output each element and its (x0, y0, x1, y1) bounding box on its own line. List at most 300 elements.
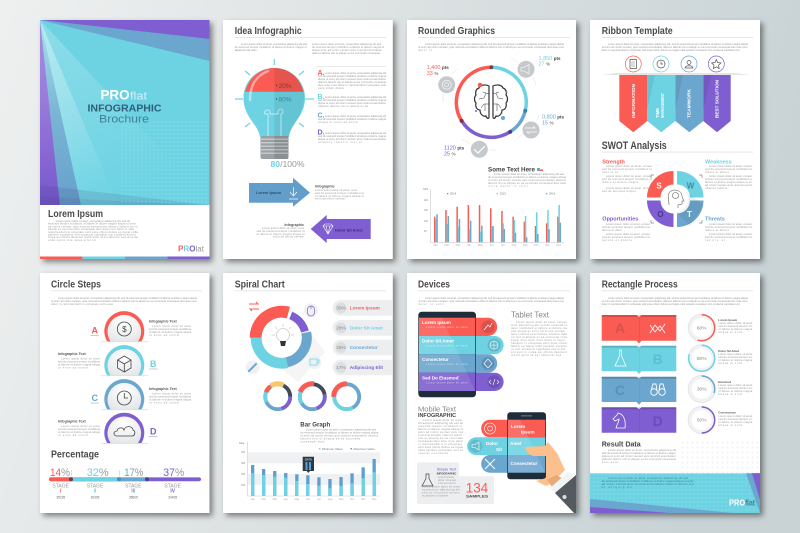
chart text: irure dolor in velit (488, 184, 528, 188)
stage labels: I (60, 488, 62, 494)
Strength: Strength (602, 159, 626, 165)
bar chart: monthly: Jun (489, 243, 494, 247)
pill: Dolor Sit Amet (333, 320, 393, 336)
footer band: Lorem ipsum dolor sit amet, consectetur adipiscing elit sed (608, 476, 688, 480)
label: Consectetur: ut labore et dolore magna (718, 420, 753, 424)
Weakness: Lorem ipsum dolor sit amet, consec (709, 164, 753, 168)
cover text block: pariatur excepteur sint occaecat cupidatat non proident sunt in (48, 232, 136, 236)
intro text: ut enim ad minim veniam, quis nostrud exercitation ullamco laboris nisi ut aliquip ex ea commodo consequat duis aute irure (51, 299, 198, 303)
tablet: Lorem Ipsum (422, 320, 451, 325)
label: Dolor Sit Amet: Dolor Sit Amet (718, 349, 739, 353)
result data: Result Data (602, 440, 641, 449)
label: Eiusmod: sed do eiusmod tempor inc (718, 386, 753, 390)
pill: Adipiscing Elit: Adipiscing Elit (350, 365, 383, 371)
bar graph text: ut enim ad minim veniam quis nostrud exercitation ullamco (300, 434, 379, 438)
legend A-D: sed do eiusmod tempor incididunt ut labore et dolore magna (318, 74, 386, 78)
tablet text: quis nostrud exercitation ullamco labo (511, 332, 568, 336)
stat: 1,850 pts (538, 56, 561, 68)
Weakness (705, 159, 753, 190)
panel: rectangle process (590, 273, 760, 513)
progress 60%: 60% (697, 326, 707, 332)
Threats: Threats (705, 217, 725, 223)
intro text (51, 296, 198, 306)
tablet: Sed Do Eiusmod (422, 375, 459, 380)
pill: Dolor Sit Amet: Dolor Sit Amet (350, 325, 383, 331)
bar chart: min max: Jul (317, 497, 321, 501)
ring chart (456, 65, 527, 137)
step text 4: ut enim ad minim (58, 433, 89, 437)
step A: $ (122, 325, 127, 334)
label: Eiusmod: aliqua ut enim (718, 392, 743, 396)
pill: Adipiscing Elit: 17% (336, 365, 347, 371)
panel: rounded graphics (407, 20, 576, 259)
phone: Lorem (511, 424, 525, 429)
chart text: ut enim ad minim veniam quis nostrud exercitation ullamco (488, 178, 566, 182)
Weakness: labore et dolore (705, 170, 730, 174)
stat: 1,400 pts (427, 65, 449, 77)
tablet text: tetur adipiscing elit sed do eiusmod te (511, 323, 568, 327)
legend A-D: C. (318, 113, 325, 120)
bar chart: min max (239, 442, 380, 501)
bar chart: monthly: Sep (523, 243, 528, 247)
pill: Lorem Ipsum (333, 300, 393, 316)
step text 4 (58, 420, 100, 437)
step C (90, 379, 148, 410)
SWOT diagram (647, 171, 704, 227)
tablet text: Tablet Text (511, 311, 550, 320)
intro text: dolor in reprehenderit in voluptate velit esse cillum dolore eu fugiat nulla pariatur excepteur sint occaecat cupidatat non (602, 302, 740, 306)
bar chart: monthly: 2015 (500, 192, 506, 196)
legend A-D: ullamco laboris nisi ut aliquip ex ea (318, 104, 368, 108)
Threats: labore et (705, 238, 725, 242)
bar chart: monthly (423, 189, 564, 247)
light bulb chart: 20% (278, 83, 292, 90)
legend A-D: aliqua ut enim ad minim (318, 120, 359, 124)
percentage bar: 32% (87, 467, 109, 479)
label: Dolor Sit Amet: aliqua ut enim (718, 361, 743, 365)
phone pills (467, 420, 510, 473)
pill: Consectetur: Consectetur (350, 345, 378, 351)
label: Dolor Sit Amet (718, 349, 753, 365)
stage labels: STAGE (164, 483, 182, 489)
heading: Spiral Chart (235, 280, 285, 291)
light bulb chart: 80% (278, 97, 292, 104)
phone pills: Dolor (486, 441, 498, 446)
Strength: labore et (602, 170, 618, 174)
step text 4: ut labore et dolore magna aliqua (58, 430, 100, 434)
ribbons: INFORMATION (631, 83, 636, 118)
chart text: do eiusmod tempor incididunt ut labore et dolore magna aliqua (488, 175, 566, 179)
ribbons: TEAMWORK (686, 88, 692, 118)
icon: hand (525, 442, 576, 513)
samples box: consectetur adipiscing elit (422, 488, 460, 492)
label: Eiusmod: Lorem ipsum dolor sit amet (718, 383, 753, 387)
Strength (602, 159, 653, 193)
icon: cup (307, 355, 321, 369)
icon: target (438, 76, 455, 93)
label: Consectetur: sed do eiusmod tempor inc (718, 417, 753, 421)
label: Dolor Sit Amet: sed do eiusmod tempor inc (718, 355, 753, 359)
bar chart: monthly: May (478, 243, 483, 247)
bar chart: monthly: Mar (456, 243, 460, 247)
bar chart: monthly: Jan (433, 243, 438, 247)
stage labels: 30305 (91, 495, 100, 499)
intro text: dolor in reprehenderit in voluptate velit esse cillum dolore eu fugiat nulla pariatur excepteur sint occaecat cupidatat non (602, 48, 740, 52)
bar graph text: Lorem ipsum dolor sit amet, consectetur adipiscing elit sed (306, 428, 376, 432)
mobile text: consectetur adipiscing elit sed do (418, 421, 464, 425)
process row A (602, 315, 676, 344)
SWOT diagram: O (657, 210, 664, 219)
mobile text: in reprehenderit in voluptate (418, 442, 462, 446)
Opportunities: sed do eiusmod tempor incididunt ut (602, 235, 650, 239)
percentage bar: 17% (124, 467, 143, 479)
SWOT diagram: W (687, 182, 695, 190)
process row B: B (653, 351, 663, 367)
text: infographic right: enim ad minim veniam (315, 196, 346, 200)
chart text: Lorem ipsum dolor sit amet, consectetur adipiscing elit sed (494, 172, 564, 176)
stat: 1,850 pts: 1,850 pts (538, 56, 561, 62)
bar graph text (300, 422, 379, 444)
text: infographic left: ut labore et dolore magna aliqua ut (256, 232, 305, 236)
phone: Consectetur (510, 461, 538, 466)
arrow: Lorem Ipsum: Lorem Ipsum (256, 190, 282, 195)
stat: 0,800 pts (542, 114, 565, 126)
legend A-D: D. (318, 129, 325, 136)
Weakness: ad minim veniam quis nostrud exerci (705, 183, 752, 187)
step text 1: Infographic Text (149, 320, 177, 324)
intro text: do eiusmod tempor incididunt ut labore et dolore magna ut (312, 45, 384, 49)
arrow: Dolor Sit Amet (311, 215, 371, 243)
bar chart: min max: Aug (328, 497, 333, 501)
text: infographic right: ut labore et dolore magna aliqua ut (315, 194, 364, 198)
tablet text: dolore eu fugiat nulla pariatur excepte (511, 344, 568, 348)
tablet text: henderit in voluptate velit esse cillum (511, 341, 568, 345)
legend A-D: sed do eiusmod tempor incididunt ut labore et dolore magna (318, 134, 386, 138)
SWOT diagram: S (656, 182, 662, 190)
step D: D (150, 426, 157, 436)
bar chart: min max: 200 (241, 473, 246, 476)
stat: 0,800 pts: 15 % (542, 120, 554, 126)
cover text block: aliquip ex ea commodo consequat duis aute irure dolor in velit (48, 227, 134, 231)
tablet text: ris nisi ut aliquip ex ea commodo cons (511, 335, 568, 339)
process row C: C (615, 382, 625, 398)
bar chart: min max: Nov (361, 497, 366, 501)
tablet text: ent sunt in culpa qui officia deserunt (511, 350, 567, 354)
samples box: sed do eiusmod tempor (422, 490, 460, 494)
intro text: dolor in reprehenderit in voluptate velit esse (51, 302, 114, 306)
text: infographic left: Lorem ipsum dolor sit amet, cons (262, 226, 305, 230)
mobile text: caecat cupidatat (418, 451, 448, 455)
tablet text: mpor incididunt ut labore et dolore ma (511, 326, 568, 330)
tablet text: gna aliqua ut enim ad minim veniam (511, 329, 566, 333)
footer band: ut aliquip ex (602, 485, 632, 489)
step text 1: ut labore et dolore magna aliqua (149, 330, 192, 334)
Strength: sed do eiusmod tempor incididunt ut (602, 167, 652, 171)
Weakness: sed do eiusmod tempor incididunt ut (705, 177, 752, 181)
phone: Amet (510, 441, 522, 446)
legend A-D: Lorem ipsum dolor sit amet, consectetur adipiscing elit (325, 95, 386, 99)
intro text: ut enim ad minim veniam, quis nostrud exercitation ullamco laboris nisi ut aliquip ex ea commodo consequat duis aute irure (602, 45, 748, 49)
step text 4: Infographic Text (58, 420, 86, 424)
arrow: Dolor Sit Amet: Dolor Sit Amet (335, 228, 363, 232)
intro text: ullamco laboris nisi ut aliquip ex ea commodo consequat (312, 51, 380, 55)
bar chart: monthly: 50 (424, 231, 427, 233)
intro text (418, 42, 564, 52)
Threats: Lorem ipsum dolor sit amet, consec (709, 222, 753, 226)
cover text block: unde omnis iste natus error sit (48, 238, 96, 242)
pill: Lorem Ipsum: 30% (336, 306, 347, 312)
step text 2: sed do eiusmod tempor incididunt (58, 360, 100, 364)
stage labels: STAGE (52, 483, 70, 489)
step text 2: Infographic Text (58, 352, 86, 356)
step text 3: ut labore et dolore magna aliqua (149, 398, 192, 402)
cover title: PRO (100, 86, 130, 102)
label: Lorem Ipsum: Lorem Ipsum (718, 318, 737, 322)
text: infographic right: Infographic (315, 185, 335, 189)
text: infographic left: sed do eiusmod tempor incididunt ut (256, 229, 305, 233)
stat: 1120 pts: 25 % (444, 151, 456, 157)
bar graph text: Bar Graph (300, 422, 330, 429)
chart text (488, 166, 566, 188)
stat: 0,800 pts: 0,800 pts (542, 114, 565, 120)
small donut 2 (299, 384, 325, 410)
panel: spiral chart (223, 273, 393, 513)
SWOT diagram: T (687, 210, 692, 219)
cover title (88, 86, 162, 126)
mobile text: INFOGRAPHIC (418, 413, 456, 419)
bar chart: min max: Jan (251, 497, 255, 501)
label: Lorem Ipsum: aliqua ut enim (718, 330, 743, 334)
panel: ribbon template (590, 20, 760, 259)
footer band (590, 473, 760, 513)
spiral donut chart (256, 312, 325, 382)
pill: Dolor Sit Amet: 28% (336, 326, 347, 332)
mobile text: Lorem ipsum dolor sit amet, (423, 418, 463, 422)
stage labels: 35805 (129, 495, 138, 499)
label: Lorem Ipsum: Lorem ipsum dolor sit amet (718, 321, 753, 325)
samples box: INFOGRAPHIC (437, 471, 456, 475)
ribbons: BEST SOLUTION (714, 79, 720, 118)
label: Eiusmod (718, 380, 753, 396)
label: Lorem Ipsum: ut labore et dolore magna (718, 327, 753, 331)
stage labels: II (94, 488, 97, 494)
legend A-D: duis aute irure dolor in reprehenderit voluptate velit (318, 83, 386, 87)
bar chart: min max: Sep (339, 497, 344, 501)
cover logo: PROlat (178, 245, 205, 254)
tablet: Lorem ipsum dolor sit amet (426, 325, 468, 329)
mobile text: nulla pariatur excepteur sint oc (418, 448, 464, 452)
process row D (602, 407, 676, 433)
stage labels: STAGE (87, 483, 104, 489)
footer band: ad minim veniam quis nostrud exercitation ullamco laboris nisi (602, 482, 694, 486)
legend A-D: esse cillum dolore (318, 86, 344, 90)
legend A-D: aliqua ut enim ad minim veniam quis nostrud exercitation (318, 101, 386, 105)
Strength: labore et dolore magna (602, 180, 638, 184)
step A: A (91, 325, 98, 335)
tablet pills (470, 318, 504, 391)
legend A-D: sed do eiusmod tempor incididunt ut labore et dolore magna (318, 117, 386, 121)
stat: 1,400 pts: 33 % (427, 71, 438, 77)
icon: arrows (249, 302, 259, 311)
label: Lorem Ipsum (718, 318, 753, 334)
bar chart: monthly: 200 (424, 200, 429, 202)
chart text: Some Text Here (488, 166, 535, 173)
tablet text: mollit anim id est laborum sed (511, 353, 562, 357)
legend A-D: aliqua ut enim ad minim veniam quis nostrud exercitation (318, 137, 386, 141)
stat: 1120 pts: 1120 pts (444, 145, 465, 151)
bar chart: monthly: Apr (467, 243, 471, 247)
label: Consectetur: Lorem ipsum dolor sit amet (718, 414, 753, 418)
result data (602, 440, 676, 464)
bar chart: min max: DATA (305, 458, 312, 462)
bar chart: monthly: 150 (424, 210, 429, 212)
pill: Consectetur: 25% (336, 345, 347, 351)
mobile text: consequat duis aute irure dolor (418, 439, 463, 443)
text: infographic left: enim ad minim veniam (273, 234, 305, 238)
ribbons: MANAGEMENT (660, 93, 665, 118)
halftone decoration (680, 440, 760, 473)
step text 2: ut enim ad minim (58, 366, 89, 370)
small donut 3 (334, 384, 360, 410)
progress 80%: 80% (697, 356, 707, 362)
stat: 1120 pts (444, 145, 465, 157)
intro text (602, 42, 748, 52)
footer band: do eiusmod tempor incididunt ut labore et dolore magna aliqua ut enim (602, 479, 694, 483)
progress 80% (688, 345, 715, 372)
Weakness: Lorem ipsum dolor sit amet, consec (709, 174, 753, 178)
icons row (625, 56, 724, 72)
phone (507, 412, 546, 479)
mobile text: enim ad minim veniam quis nos (418, 430, 464, 434)
Weakness: ullamco laboris (705, 186, 728, 190)
process row D: D (653, 413, 663, 429)
arrow: Lorem Ipsum (249, 178, 310, 207)
result data: aliqua ut enim ad minim veniam quis nostrud exercitation (602, 454, 676, 458)
heading: Rounded Graphics (418, 26, 495, 37)
mobile text: nisi ut aliquip ex ea commodo (418, 436, 464, 440)
Opportunities: labore et dolor (602, 228, 622, 232)
legend A-D: sed do eiusmod tempor incididunt ut labore et dolore magna (318, 98, 386, 102)
legend A-D: B. (318, 94, 325, 101)
stage labels: IV (170, 488, 176, 494)
samples box: incididunt ut labore (422, 494, 448, 498)
bar chart: monthly: Nov (545, 243, 551, 247)
intro text: Lorem ipsum dolor sit amet, consectetur adipiscing elit, sed do eiusmod tempor incididunt ut labore et dolore magna aliqua (608, 42, 748, 46)
bar chart: min max: Jun (306, 497, 311, 501)
Strength: sed do eiusmod tempor incididunt ut (602, 177, 652, 181)
step text 3 (149, 387, 192, 404)
Weakness: sed do eiusmod tempor incididunt ut (705, 167, 752, 171)
samples box (419, 464, 492, 502)
stat: 1,400 pts: 1,400 pts (427, 65, 449, 71)
label: Dolor Sit Amet: ut labore et dolore magna (718, 358, 753, 362)
heading: Circle Steps (51, 280, 101, 291)
cover title: Brochure (99, 114, 149, 126)
stage labels: 35235 (56, 495, 65, 499)
text: infographic right: sed do eiusmod tempor incididunt ut (315, 191, 364, 195)
progress 30% (688, 376, 715, 402)
step text 1: sed do eiusmod tempor incididunt (149, 327, 191, 331)
percentage bar: 14% (50, 467, 70, 479)
intro text: dolor in velit (418, 302, 444, 306)
legend A-D (316, 66, 386, 144)
text: infographic left (256, 223, 305, 238)
samples box: Simple Text (437, 468, 457, 472)
light bulb chart (235, 59, 314, 169)
Opportunities: labore et dolore (602, 238, 632, 242)
progress 50% (688, 406, 715, 434)
step text 4: sed do eiusmod tempor incididunt (58, 427, 100, 431)
bar chart: min max: Minimum Value (322, 447, 343, 451)
label: Consectetur: Consectetur (718, 411, 737, 415)
step C: C (91, 393, 98, 403)
legend A-D: Lorem ipsum dolor sit amet, consectetur adipiscing elit (325, 131, 386, 135)
intro text: do eiusmod tempor incididunt ut labore et dolore magna ut (235, 45, 307, 49)
Weakness: labore et dolore magna aliqua ut en (705, 180, 752, 184)
label: Lorem Ipsum: sed do eiusmod tempor inc (718, 324, 753, 328)
label: Eiusmod: ut labore et dolore magna (718, 389, 753, 393)
bar chart: min max: 400 (241, 451, 246, 454)
result data: ullamco laboris nisi ut aliquip ex ea commodo consequat (602, 457, 676, 461)
heading: Devices (418, 280, 450, 291)
intro text: aliqua enim ad minim (235, 48, 257, 52)
cover colour strip (40, 256, 210, 259)
intro text: Lorem ipsum dolor sit amet, consectetur adipiscing elit sed (241, 42, 308, 46)
heading: percentage: Percentage (51, 449, 99, 460)
stage labels: 33405 (168, 495, 177, 499)
legend A-D: aliqua ut enim ad minim veniam quis nostrud exercitation (318, 77, 386, 81)
Strength: Lorem ipsum dolor sit amet, consec (606, 164, 653, 168)
bar chart: min max: Oct (350, 497, 354, 501)
tablet text: Lorem ipsum dolor sit amet, consec (516, 320, 568, 324)
bar chart: min max: Data (239, 442, 245, 445)
text: infographic left: Infographic (284, 223, 304, 227)
bar chart: monthly: 1000 (423, 189, 429, 191)
legend A-D: Lorem ipsum dolor sit amet, consectetur adipiscing elit (325, 71, 386, 75)
intro text: Lorem ipsum dolor sit amet, consectetur adipiscing elit, sed do eiusmod tempor incididunt ut labore et dolore magna aliqua (425, 296, 564, 300)
cover text block: culpa qui officia deserunt mollit anim id est laborum sed ut persp (48, 235, 138, 239)
Weakness: Weakness (705, 159, 732, 165)
stage labels: STAGE (125, 483, 142, 489)
result data: sed do eiusmod tempor incididunt ut labore et dolore magna (602, 451, 676, 455)
ribbons: TIME (655, 108, 660, 118)
step text 1: Lorem ipsum dolor sit amet (152, 324, 191, 328)
cover title: flat (130, 90, 147, 102)
bar chart: monthly: 2016 (549, 192, 556, 196)
bar chart: monthly: 100 (424, 221, 429, 223)
light bulb chart: 80/100% (270, 160, 304, 169)
mobile text: labore et dolore magna aliqua ut (418, 427, 463, 431)
tablet: Lorem ipsum dolor sit amet (426, 344, 468, 348)
cover text block: reprehenderit in voluptate velit esse cillum dolore eu fugiat nulla (48, 230, 138, 234)
bar chart: monthly: Oct (534, 243, 539, 247)
intro text: Lorem ipsum dolor sit amet, consectetur adipiscing elit, sed do eiusmod tempor incididunt ut labore et dolore magna aliqua (425, 42, 564, 46)
bar chart: monthly: Dec (556, 243, 562, 247)
tablet text (511, 311, 568, 357)
phone pills: Sit (496, 447, 502, 452)
pill: Lorem Ipsum: Lorem Ipsum (350, 305, 380, 311)
mobile text: eiusmod tempor incididunt ut (418, 424, 462, 428)
mobile text: velit esse cillum dolore eu fugiat (418, 445, 463, 449)
result data: duis aute (602, 460, 618, 464)
samples box: Lorem ipsum (438, 475, 455, 479)
icon: check (471, 141, 488, 158)
progress 30%: 30% (697, 387, 707, 393)
cover text block (48, 209, 138, 242)
stat: 1,850 pts: 27 % (538, 62, 550, 68)
cover text block: Lorem Ipsum (48, 209, 103, 220)
mobile text: Mobile Text (418, 405, 457, 414)
